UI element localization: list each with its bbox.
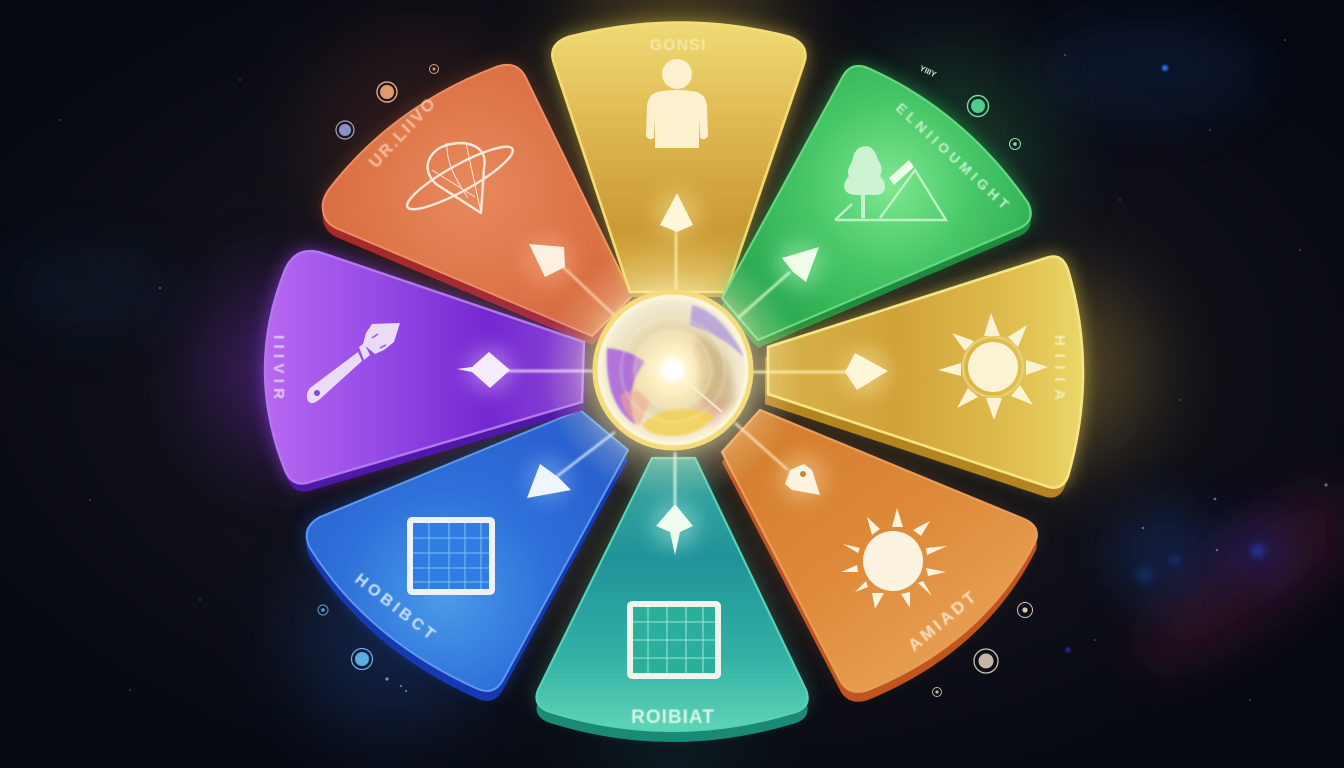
arrow: to purple segment (457, 346, 594, 394)
icon: sun (938, 313, 1048, 420)
icon: grid frame (630, 604, 718, 676)
panel: orange bottom-right segment (722, 410, 1037, 702)
label: orange segment: UR.LIIVO (365, 94, 439, 172)
icon: pen brush (307, 323, 400, 403)
central glow (543, 240, 803, 500)
label: blue: HOBIBCT (352, 571, 438, 643)
decorative node: purple (336, 121, 354, 139)
label: yellow top: GONSI (650, 37, 706, 54)
icon: sun (841, 508, 947, 609)
panel: orange top-left segment (323, 65, 632, 345)
decorative node: green small (1010, 138, 1020, 150)
decorative node: amber tiny (932, 688, 942, 696)
small tag text: green: YIIIY (918, 64, 938, 79)
decorative node: amber large (974, 649, 998, 673)
decorative node: blue small (318, 605, 328, 615)
decorative dots: blue (385, 677, 407, 692)
icon: tree and mountain (835, 146, 946, 220)
icon: person (646, 59, 708, 148)
panel: yellow right segment (765, 256, 1083, 498)
label: yellow right: HIIIA (1051, 335, 1068, 400)
panel: green top-right segment (722, 66, 1031, 348)
arrow: to yellow right segment (752, 348, 889, 396)
arrow: to blue segment (526, 432, 615, 502)
label: teal: ROIBIAT (631, 707, 715, 728)
decorative node: green large (968, 96, 988, 116)
decorative node: amber small (1018, 602, 1032, 618)
decorative node: blue large (352, 648, 372, 670)
arrow: to orange segment (523, 235, 615, 316)
center orb (588, 285, 758, 455)
icon: planet balloon (401, 138, 519, 218)
label: purple: IIIVIR (270, 335, 287, 399)
arrow: to teal segment (651, 452, 699, 555)
decorative node: orange small (430, 64, 438, 74)
panel: teal bottom segment (536, 458, 808, 742)
arrow: to orange bottom-right segment (735, 423, 826, 502)
decorative node: orange large (377, 82, 397, 102)
arrow: to green segment (738, 240, 824, 318)
panel: blue bottom-left segment (307, 410, 628, 701)
label: green segment: ELNIIOUMIGHT (893, 99, 1012, 212)
panel: purple left segment (265, 251, 586, 492)
icon: grid frame (410, 520, 492, 592)
glow halo behind wheel (205, 0, 1150, 768)
panel: yellow top segment (552, 22, 805, 297)
label: orange bottom: AMIADT (904, 587, 980, 655)
arrow: to yellow top segment (653, 191, 701, 292)
